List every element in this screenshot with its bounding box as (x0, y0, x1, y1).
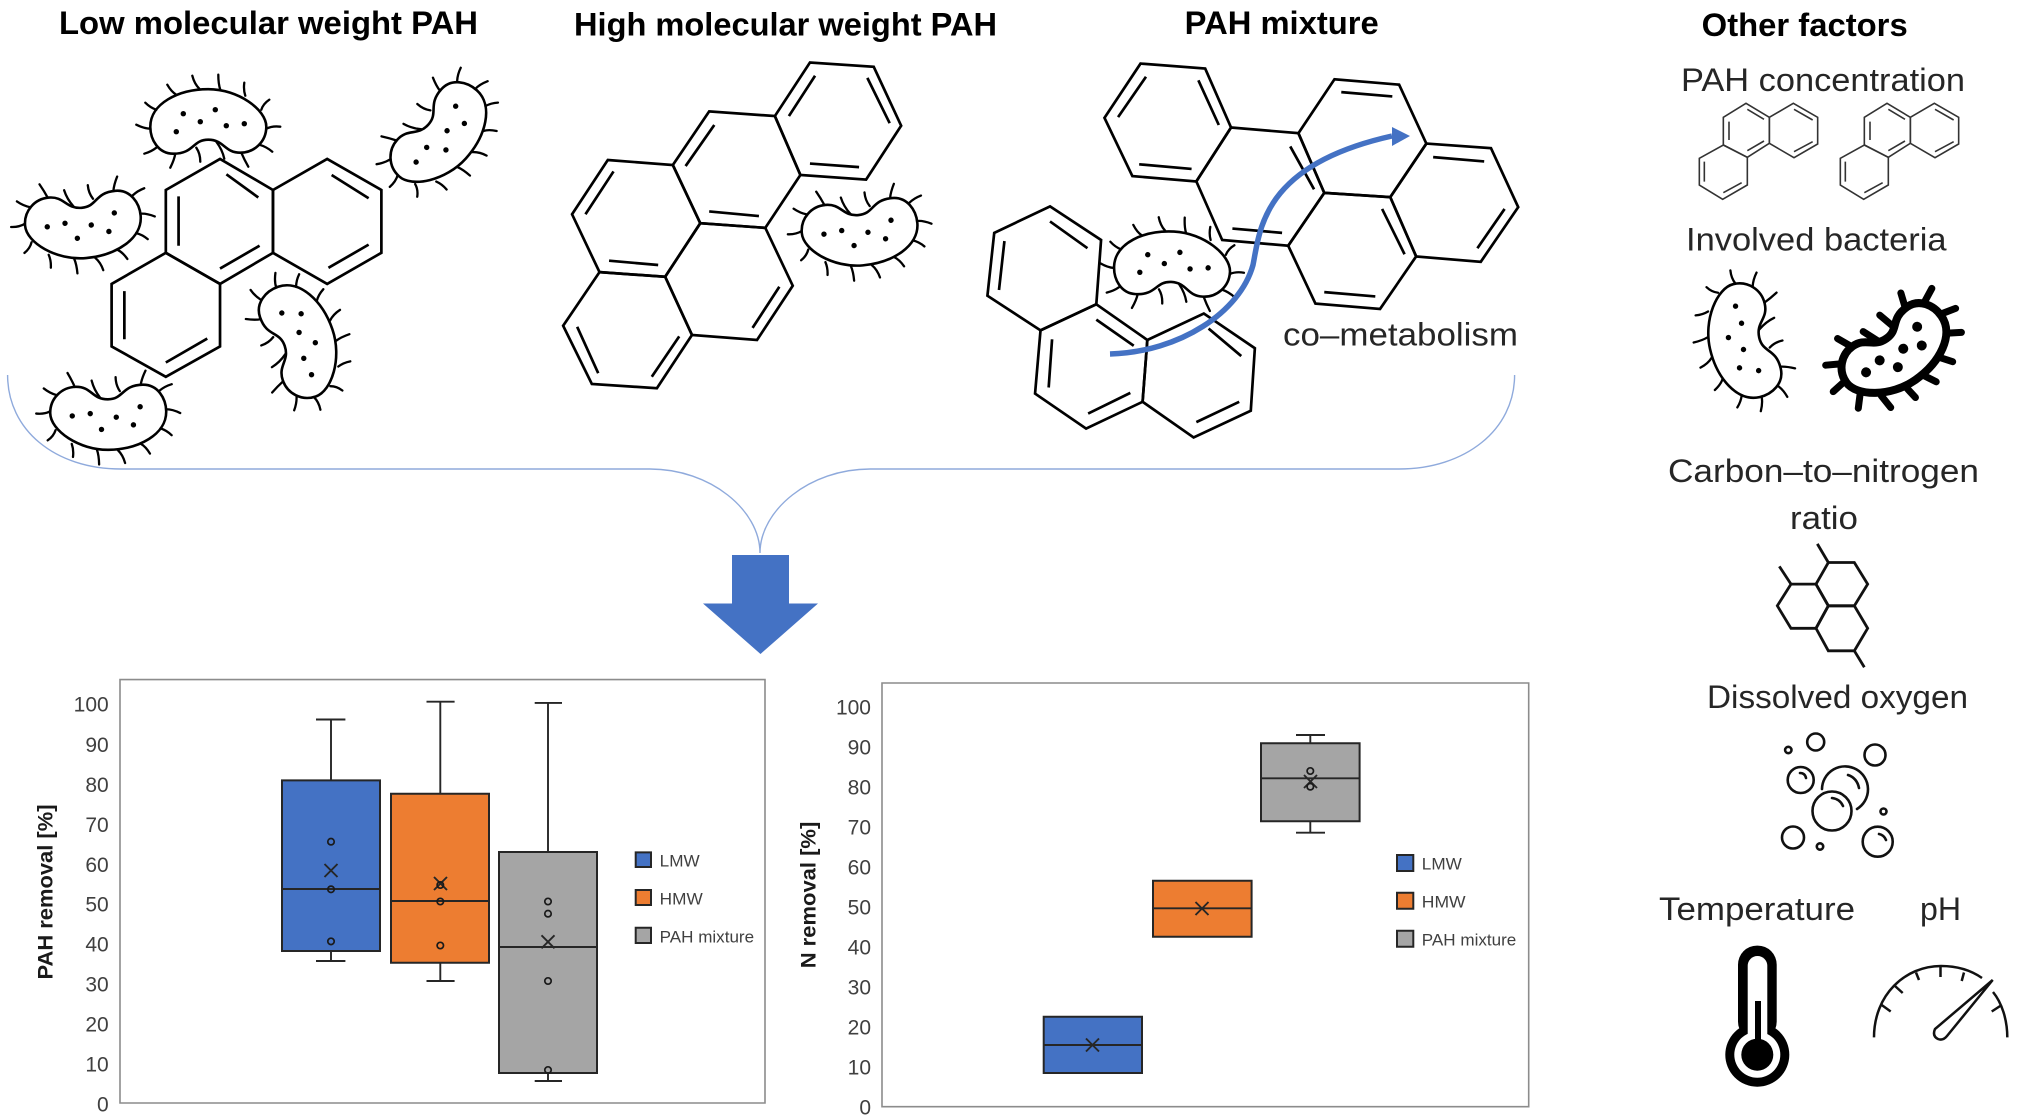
label: involved bacteria: Involved bacteria (1686, 222, 1947, 258)
y axis ticks: 100 (836, 696, 871, 720)
icon: oxygen bubbles (1782, 734, 1893, 857)
y axis ticks: 90 (85, 734, 109, 757)
molecule: low molecular weight PAH (112, 159, 381, 377)
legend (636, 852, 754, 946)
y axis ticks (74, 694, 109, 1116)
legend: PAH mixture (660, 928, 754, 946)
y axis title: PAH removal [%] (35, 804, 58, 980)
legend: LMW (1422, 854, 1462, 873)
box: PAH mixture (1261, 735, 1360, 833)
label: carbon-to-nitrogen ratio (1668, 453, 1979, 536)
heading: low molecular weight PAH: Low molecular weight PAH (59, 5, 478, 41)
y axis ticks: 80 (85, 774, 109, 797)
label: temperature: Temperature (1659, 891, 1855, 927)
y axis title: N removal [%] (798, 822, 820, 968)
bacterium: bottom left (36, 370, 181, 466)
bacterium: lower middle (235, 257, 370, 423)
y axis ticks: 70 (848, 816, 871, 840)
y axis ticks: 0 (97, 1094, 109, 1116)
y axis ticks: 20 (848, 1016, 871, 1040)
y axis ticks: 20 (85, 1014, 109, 1036)
bacterium: PAH mixture panel (1098, 213, 1247, 314)
y axis ticks: 50 (848, 896, 871, 920)
legend: PAH mixture (1422, 930, 1516, 949)
y axis ticks: 10 (848, 1056, 871, 1080)
y axis ticks: 60 (848, 856, 871, 880)
bacterium: left (8, 174, 159, 279)
y axis ticks: 0 (859, 1096, 871, 1119)
bacterium: high molecular weight panel (784, 181, 936, 286)
legend: HMW (1422, 892, 1466, 911)
arrow: down block arrow (703, 555, 818, 654)
label: pH: pH (1920, 891, 1961, 927)
legend (1397, 854, 1516, 949)
arrow: co-metabolism (1110, 127, 1410, 354)
icon: PAH concentration molecules (1699, 103, 1959, 199)
y axis ticks: 40 (85, 934, 109, 957)
chart: N removal box plot (798, 683, 1529, 1119)
label: PAH concentration: PAH concentration (1681, 62, 1965, 98)
y axis ticks: 100 (74, 694, 109, 716)
label: carbon-to-nitrogen ratio: ratio (1790, 500, 1858, 536)
box: HMW (1153, 881, 1252, 937)
label: co-metabolism: co–metabolism (1283, 316, 1518, 352)
legend: LMW (660, 852, 700, 870)
molecule: PAH mixture upper (1104, 64, 1518, 309)
bracket connector (8, 375, 1515, 553)
bacterium: upper right (359, 52, 525, 222)
box: PAH mixture (499, 703, 597, 1081)
icon: outline bacterium (1680, 261, 1803, 422)
icon: black bacterium (1809, 272, 1984, 434)
molecule: PAH mixture lower (987, 206, 1255, 437)
y axis ticks: 60 (85, 854, 109, 877)
box: HMW (391, 702, 489, 981)
y axis ticks (836, 696, 871, 1119)
heading: PAH mixture: PAH mixture (1185, 5, 1379, 41)
label: dissolved oxygen: Dissolved oxygen (1707, 679, 1968, 715)
icon: thermometer (1725, 946, 1789, 1087)
y axis ticks: 50 (85, 894, 109, 917)
heading: high molecular weight PAH: High molecular weight PAH (574, 6, 997, 42)
y axis ticks: 80 (848, 776, 871, 800)
heading: other factors: Other factors (1702, 7, 1908, 43)
y axis ticks: 30 (85, 974, 109, 997)
box: LMW (1044, 1017, 1142, 1073)
y axis ticks: 90 (848, 736, 871, 760)
legend: HMW (660, 890, 703, 908)
icon: pH gauge (1874, 966, 2007, 1040)
y axis ticks: 40 (848, 936, 871, 960)
chart: PAH removal box plot (35, 680, 765, 1116)
box: LMW (282, 720, 380, 961)
label: carbon-to-nitrogen ratio: Carbon–to–nitrogen (1668, 453, 1979, 489)
bacterium: top (136, 75, 280, 168)
icon: carbon lattice (1777, 544, 1868, 667)
molecule: high molecular weight PAH (563, 62, 901, 388)
y axis ticks: 70 (85, 814, 109, 837)
y axis ticks: 10 (85, 1054, 109, 1076)
y axis ticks: 30 (848, 976, 871, 1000)
